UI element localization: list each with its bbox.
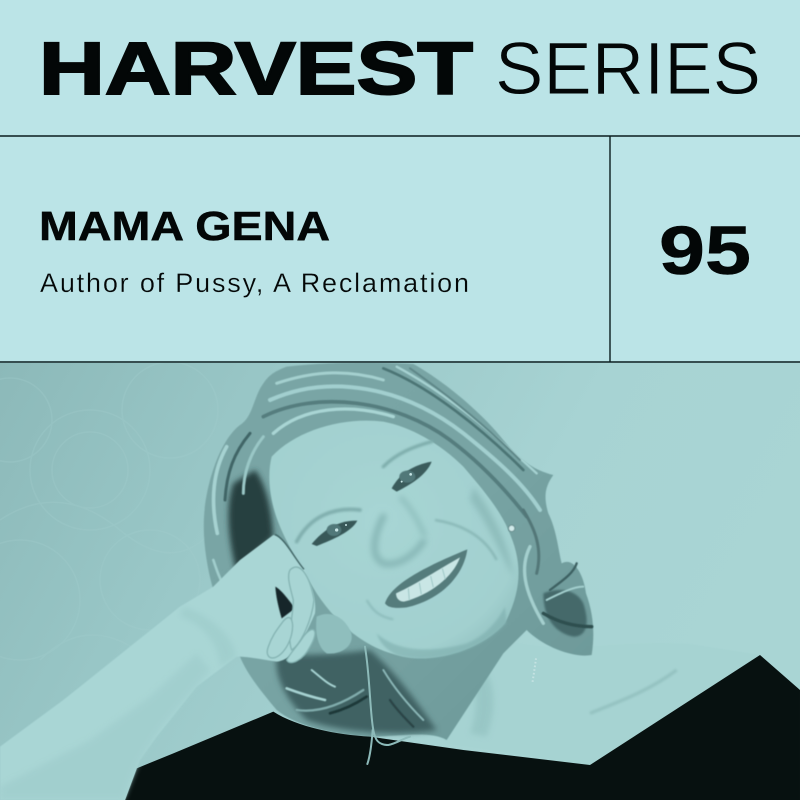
face — [269, 421, 519, 658]
photo backdrop — [0, 363, 800, 800]
neck shadow — [463, 653, 493, 737]
right eye — [383, 442, 432, 492]
nose shading — [375, 517, 423, 564]
person — [0, 362, 800, 800]
title: Harvest Series: HARVEST — [39, 27, 473, 110]
header divider lines — [0, 136, 800, 362]
finger shadow — [275, 587, 295, 618]
wallpaper pattern — [0, 362, 220, 660]
hair outline — [204, 362, 593, 740]
arm and hand — [0, 535, 315, 800]
palm under face — [316, 614, 352, 653]
hair shadow lower — [276, 650, 437, 733]
wrist shading — [180, 607, 237, 667]
title: Harvest Series — [39, 27, 761, 110]
temple shadow — [470, 487, 513, 577]
long earring — [365, 647, 410, 764]
hand-to-face edge — [275, 534, 304, 569]
cheek crease — [435, 520, 497, 560]
guest name: MAMA GENA — [39, 203, 330, 249]
mouth — [367, 549, 467, 619]
hair shadow right lower — [543, 590, 587, 637]
nose bridge shadow — [400, 497, 425, 537]
arm lower shading — [0, 653, 210, 800]
necklace — [532, 658, 536, 683]
fingers — [267, 567, 315, 663]
hair shadow left — [229, 470, 273, 573]
title: Harvest Series: SERIES — [495, 27, 761, 110]
neck and chest — [370, 627, 760, 765]
portrait photo — [0, 362, 800, 800]
episode number: 95 — [659, 212, 751, 289]
guest description: Author of Pussy, A Reclamation — [40, 268, 469, 298]
chest crease — [590, 670, 677, 713]
earring stud — [508, 525, 515, 532]
left eye — [297, 509, 360, 546]
hair strands — [213, 367, 592, 727]
black dress — [125, 655, 800, 800]
face shadow — [377, 607, 507, 659]
